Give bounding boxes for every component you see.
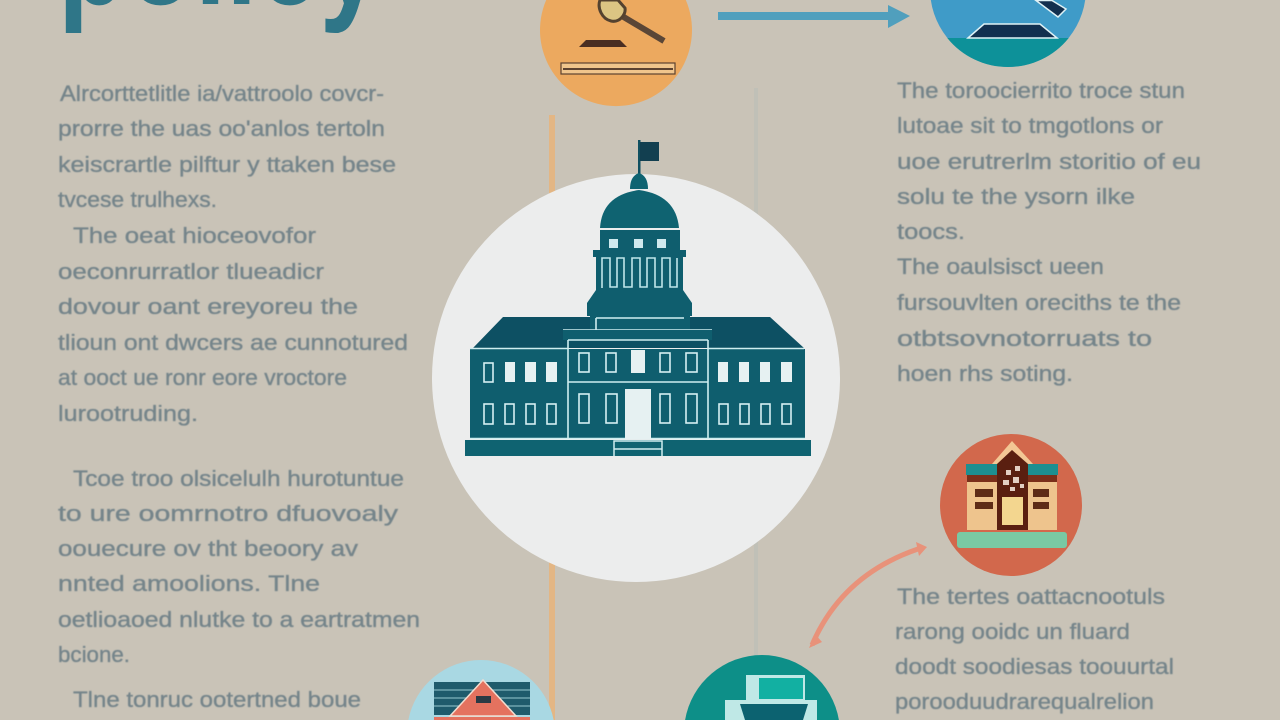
text block: left column, first paragraph: Alrcorttetlitle ia/vattroolo covcr- xyxy=(60,81,384,106)
arrow: curved red xyxy=(809,542,927,648)
text block: left column, third paragraph: Tcoe troo olsicelulh hurotuntue xyxy=(73,466,404,491)
text block: left column, third paragraph: bcione. xyxy=(58,642,130,667)
striped roof xyxy=(434,682,530,715)
roof apex xyxy=(992,441,1033,464)
ship xyxy=(968,24,1057,38)
red gable xyxy=(450,680,516,716)
text block: left column, second paragraph: at ooct ue ronr eore vroctore xyxy=(58,365,347,390)
paper tray xyxy=(746,675,805,700)
icon: printer on teal circle xyxy=(685,655,839,720)
tool xyxy=(1036,0,1066,17)
connector: grey vertical line xyxy=(754,88,758,658)
text block: right column, second paragraph: The oaulsisct ueen xyxy=(897,254,1104,279)
text block: left column, second paragraph: dovour oant ereyoreu the xyxy=(58,294,358,319)
windows xyxy=(505,350,792,439)
text block: left column, second paragraph: lurootruding. xyxy=(58,401,198,426)
bar xyxy=(561,63,675,74)
text block: left column, second paragraph: tlioun ont dwcers ae cunnotured xyxy=(58,330,408,355)
text block: right column, first paragraph: lutoae sit to tmgotlons or xyxy=(897,113,1163,138)
text block: left column, first paragraph xyxy=(58,81,396,212)
text block: right column, first paragraph: uoe erutrerlm storitio of eu xyxy=(897,149,1201,174)
house front xyxy=(434,717,530,720)
green base xyxy=(957,532,1067,548)
text block: left column, second paragraph: oeconrurratlor tlueadicr xyxy=(58,259,324,284)
text block: left column, first paragraph: prorre the uas oo'anlos tertoln xyxy=(58,116,385,141)
text block: right column, third paragraph xyxy=(895,584,1174,714)
roof xyxy=(473,315,804,348)
text block: left column, third paragraph: oouecure ov tht beoory av xyxy=(58,536,358,561)
text block: left column, second paragraph: The oeat hioceovofor xyxy=(73,223,316,248)
flag xyxy=(638,140,659,176)
text block: right column, second paragraph: fursouvlten oreciths te the xyxy=(897,290,1181,315)
arrow: gavel to ship xyxy=(718,5,910,28)
text block: right column, third paragraph: doodt soodiesas toouurtal xyxy=(895,654,1174,679)
text block: right column, third paragraph: rarong ooidc un fluard xyxy=(895,619,1130,644)
text block: right column, second paragraph: hoen rhs soting. xyxy=(897,361,1073,386)
text block: right column, first paragraph: solu te the ysorn ilke xyxy=(897,184,1135,209)
text block: left column, third paragraph xyxy=(58,466,420,667)
text block: left column, third paragraph: oetlioaoed nlutke to a eartratmen xyxy=(58,607,420,632)
text block: left column, first paragraph: keiscrartle pilftur y ttaken bese xyxy=(58,152,396,177)
base and steps xyxy=(465,440,811,456)
text block: left column, third paragraph: to ure oomrnotro dfuovoaly xyxy=(58,501,398,526)
connector: orange vertical line xyxy=(549,115,555,720)
central circle with building xyxy=(432,140,840,582)
text block: left column, second paragraph xyxy=(58,223,408,426)
icon: house circle xyxy=(940,434,1082,576)
wings and centre block xyxy=(470,330,805,439)
icon: capitol building xyxy=(465,140,811,456)
text block: right column, first paragraph xyxy=(897,78,1201,244)
gavel xyxy=(599,0,664,41)
tower and door xyxy=(997,450,1028,530)
text block: left column, third paragraph: nnted amoolions. Tlne xyxy=(58,571,320,596)
text block: right column, third paragraph: porooduudrarequalrelion xyxy=(895,689,1154,714)
icon: house on light blue circle xyxy=(408,660,554,720)
printer body xyxy=(725,700,817,720)
building wings xyxy=(966,464,1058,530)
dome xyxy=(587,173,692,316)
text block: right column, third paragraph: The tertes oattacnootuls xyxy=(897,584,1165,609)
icon: gavel circle xyxy=(540,0,692,106)
sound block xyxy=(579,40,627,47)
text block: left column, fourth paragraph: Tlne tonruc ootertned boue xyxy=(73,687,361,712)
text block: right column, first paragraph: The toroocierrito troce stun xyxy=(897,78,1185,103)
text block: right column, second paragraph: otbtsovnotorruats to xyxy=(897,326,1152,351)
text block: right column, second paragraph xyxy=(897,254,1181,386)
text block: left column, first paragraph: tvcese trulhexs. xyxy=(58,187,217,212)
icon: ship circle xyxy=(931,0,1085,67)
text block: right column, first paragraph: toocs. xyxy=(897,219,965,244)
